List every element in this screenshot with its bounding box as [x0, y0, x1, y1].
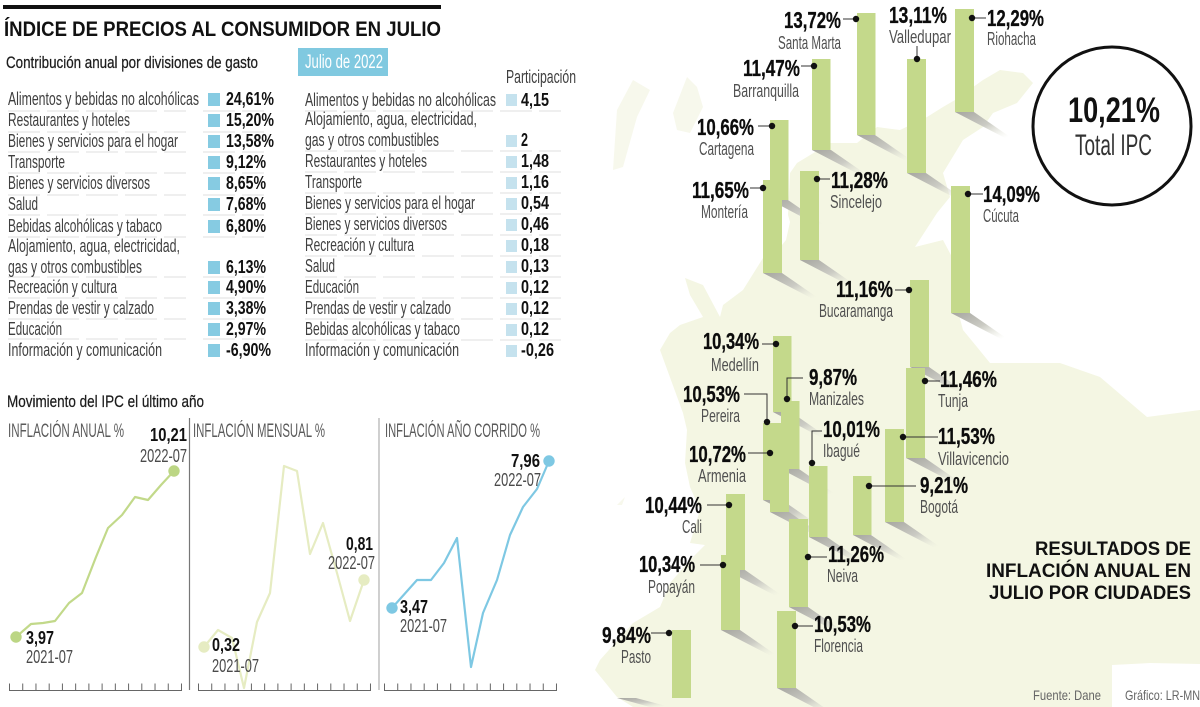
city: Neiva	[789, 519, 884, 634]
table: annual contribution by spending division: 7,68%	[226, 194, 266, 214]
table: annual contribution by spending division: Restaurantes y hoteles	[8, 110, 130, 130]
city: Pasto: 9,84%	[602, 622, 651, 648]
city: Tunja	[906, 366, 997, 485]
table: participation by spending division: Alimentos y bebidas no alcohólicas	[305, 90, 496, 110]
table: annual contribution by spending division: 15,20%	[226, 110, 274, 130]
chart: monthly inflation: 2022-07	[328, 553, 375, 573]
city: Sincelejo: 11,28%	[831, 167, 888, 193]
chart: monthly inflation: INFLACIÓN MENSUAL %	[193, 420, 325, 442]
city: Armenia	[689, 423, 828, 539]
city: Riohacha: 12,29%	[987, 5, 1044, 31]
table: participation by spending division: Prendas de vestir y calzado	[305, 298, 451, 318]
table: annual contribution by spending division: Recreación y cultura	[8, 277, 118, 297]
table: participation by spending division: 4,15	[521, 90, 549, 110]
city: Armenia: Armenia	[698, 466, 747, 486]
city: Pasto	[602, 622, 691, 707]
city: Popayán: 10,34%	[639, 551, 695, 577]
table: annual contribution by spending division: Prendas de vestir y calzado	[8, 298, 154, 318]
city: Valledupar: 13,11%	[889, 2, 947, 28]
city: Santa Marta: Santa Marta	[778, 33, 842, 53]
table: annual contribution by spending division: Información y comunicación	[8, 340, 162, 360]
city: Cali	[645, 492, 784, 597]
source: Fuente: Dane	[1033, 687, 1101, 703]
city: Riohacha	[955, 5, 1044, 139]
table: participation by spending division: 2	[521, 130, 528, 150]
table: annual contribution by spending division: Transporte	[8, 152, 65, 172]
table: participation by spending division: gas y otros combustibles	[305, 130, 439, 150]
city: Manizales: Manizales	[809, 389, 864, 409]
city: Medellín: 10,34%	[703, 328, 759, 354]
table: annual contribution by spending division: Salud	[8, 194, 38, 214]
city: Santa Marta: 13,72%	[784, 7, 841, 33]
table: participation by spending division: Bebidas alcohólicas y tabaco	[305, 319, 460, 339]
city: Florencia: Florencia	[814, 636, 864, 656]
city: Barranquilla	[733, 55, 870, 177]
city: Bogotá	[853, 472, 968, 562]
subheading: contribution table: Contribución anual por divisiones de gasto	[6, 53, 258, 72]
city: Bogotá: 9,21%	[920, 472, 968, 498]
table: annual contribution by spending division: Alimentos y bebidas no alcohólicas	[8, 89, 199, 109]
city: Neiva: 11,26%	[828, 541, 884, 567]
column header: participation: Participación	[506, 67, 576, 87]
city: Ibagué: 10,01%	[823, 416, 880, 442]
city: Pereira: Pereira	[701, 406, 741, 426]
table: participation by spending division: Transporte	[305, 172, 362, 192]
table: annual contribution by spending division: Educación	[8, 319, 62, 339]
city: Tunja: Tunja	[938, 391, 969, 411]
map heading: RESULTADOS DE	[1035, 539, 1191, 560]
city: Medellín	[703, 328, 830, 439]
city: Montería	[692, 177, 821, 300]
table: participation by spending division: 1,48	[521, 151, 549, 171]
city: Ibagué: Ibagué	[823, 441, 860, 461]
city: Popayán: Popayán	[648, 577, 695, 597]
map of Colombia	[595, 70, 1200, 707]
chart: annual inflation: 3,97	[26, 628, 54, 648]
city: Bucaramanga	[819, 276, 968, 394]
city: Armenia: 10,72%	[689, 441, 746, 467]
city: Bucaramanga: Bucaramanga	[819, 301, 894, 321]
title bar and heading: ÍNDICE DE PRECIOS AL CONSUMIDOR EN JULIO	[4, 18, 441, 41]
city: Florencia: 10,53%	[814, 611, 871, 637]
callout: total CPI	[1033, 47, 1191, 205]
subheading: CPI movement: Movimiento del IPC el último año	[7, 392, 204, 411]
table: participation by spending division: 0,13	[521, 256, 549, 276]
table: participation by spending division: 1,16	[521, 172, 549, 192]
city: Cúcuta: Cúcuta	[983, 206, 1020, 226]
table: annual contribution by spending division: 4,90%	[226, 277, 266, 297]
city: Manizales	[781, 364, 864, 496]
table: participation by spending division	[305, 90, 561, 360]
table: annual contribution by spending division: 8,65%	[226, 173, 266, 193]
city: Montería: 11,65%	[692, 177, 749, 203]
chart: monthly inflation: 0,32	[212, 635, 240, 655]
chart: annual inflation: 2021-07	[26, 647, 73, 667]
table: annual contribution by spending division: gas y otros combustibles	[8, 257, 142, 277]
city: Cúcuta: 14,09%	[983, 181, 1040, 207]
chart: year-to-date inflation: 2021-07	[400, 616, 447, 636]
table: participation by spending division: 0,54	[521, 193, 549, 213]
callout: total CPI: Total IPC	[1075, 129, 1152, 162]
city: Cartagena: Cartagena	[699, 139, 755, 159]
table: annual contribution by spending division: 2,97%	[226, 319, 266, 339]
table: annual contribution by spending division: 6,13%	[226, 257, 266, 277]
table: annual contribution by spending division: Bebidas alcohólicas y tabaco	[8, 216, 162, 236]
city: Villavicencio	[885, 423, 1009, 549]
city: Barranquilla: Barranquilla	[733, 81, 800, 101]
table: participation by spending division: 0,46	[521, 214, 549, 234]
table: annual contribution by spending division: 3,38%	[226, 298, 266, 318]
map heading: INFLACIÓN ANUAL EN	[986, 560, 1191, 582]
map heading	[986, 539, 1191, 604]
table: annual contribution by spending division	[8, 89, 274, 360]
chart: year-to-date inflation: 3,47	[400, 597, 428, 617]
chart divider	[378, 418, 380, 690]
city: Valledupar: Valledupar	[889, 27, 951, 47]
city: Cúcuta	[951, 181, 1040, 340]
table: participation by spending division: 0,12	[521, 319, 549, 339]
city: Sincelejo: Sincelejo	[830, 192, 882, 212]
city: Valledupar	[889, 2, 965, 200]
chart: monthly inflation: 2021-07	[212, 656, 259, 676]
date badge	[298, 48, 388, 76]
city: Popayán	[639, 551, 779, 657]
city: Santa Marta	[778, 7, 914, 162]
chart: year-to-date inflation: 2022-07	[494, 470, 541, 490]
city: Bogotá: Bogotá	[920, 497, 959, 517]
city: Neiva: Neiva	[827, 566, 859, 586]
table: annual contribution by spending division: 13,58%	[226, 131, 274, 151]
city: Cali: 10,44%	[645, 492, 702, 518]
table: participation by spending division: 0,18	[521, 235, 549, 255]
chart: annual inflation: INFLACIÓN ANUAL %	[8, 420, 124, 442]
table: annual contribution by spending division: -6,90%	[226, 340, 271, 360]
city: Cali: Cali	[682, 517, 702, 537]
table: participation by spending division: Bienes y servicios diversos	[305, 214, 447, 234]
chart: year-to-date inflation: INFLACIÓN AÑO CORRIDO %	[385, 420, 540, 442]
city: Sincelejo	[800, 167, 888, 287]
table: annual contribution by spending division: 9,12%	[226, 152, 266, 172]
chart: year-to-date inflation	[384, 420, 557, 690]
table: annual contribution by spending division: 6,80%	[226, 216, 266, 236]
table: participation by spending division: -0,26	[521, 340, 554, 360]
city: Bucaramanga: 11,16%	[836, 276, 893, 302]
city: Florencia	[777, 611, 871, 707]
city: Riohacha: Riohacha	[987, 29, 1037, 49]
table: participation by spending division: Salud	[305, 256, 335, 276]
map heading: JULIO POR CIUDADES	[989, 583, 1191, 604]
chart divider	[188, 418, 190, 690]
chart: annual inflation: 2022-07	[140, 446, 187, 466]
table: annual contribution by spending division: Bienes y servicios para el hogar	[8, 131, 178, 151]
city: Cartagena: 10,66%	[697, 114, 754, 140]
table: annual contribution by spending division: 24,61%	[226, 89, 274, 109]
city: Cartagena	[697, 114, 827, 227]
table: participation by spending division: Restaurantes y hoteles	[305, 151, 427, 171]
city: Pereira	[683, 381, 821, 527]
city: Medellín: Medellín	[711, 355, 759, 375]
city: Ibagué	[809, 416, 880, 564]
title bar and heading	[3, 5, 441, 41]
table: participation by spending division: Recreación y cultura	[305, 235, 415, 255]
table: participation by spending division: Educación	[305, 277, 359, 297]
city: Pereira: 10,53%	[683, 381, 740, 407]
city: Villavicencio: 11,53%	[938, 423, 995, 449]
chart: monthly inflation: 0,81	[346, 534, 373, 554]
chart: annual inflation	[8, 420, 187, 690]
city: Pasto: Pasto	[621, 647, 651, 667]
city: Manizales: 9,87%	[809, 364, 857, 390]
city: Villavicencio: Villavicencio	[938, 449, 1009, 469]
city: Montería: Montería	[701, 202, 749, 222]
table: annual contribution by spending division: Alojamiento, agua, electricidad,	[8, 236, 180, 256]
table: annual contribution by spending division: Bienes y servicios diversos	[8, 173, 150, 193]
table: participation by spending division: 0,12	[521, 277, 549, 297]
city: Tunja: 11,46%	[940, 366, 997, 392]
chart: year-to-date inflation: 7,96	[511, 451, 540, 471]
city: Barranquilla: 11,47%	[743, 55, 800, 81]
date badge: Julio de 2022	[305, 52, 383, 73]
table: participation by spending division: Alojamiento, agua, electricidad,	[305, 109, 477, 129]
table: participation by spending division: Bienes y servicios para el hogar	[305, 193, 475, 213]
chart: annual inflation: 10,21	[150, 425, 187, 445]
callout: total CPI: 10,21%	[1068, 91, 1160, 130]
table: participation by spending division: 0,12	[521, 298, 549, 318]
chart: monthly inflation	[193, 420, 375, 690]
table: participation by spending division: Información y comunicación	[305, 340, 459, 360]
